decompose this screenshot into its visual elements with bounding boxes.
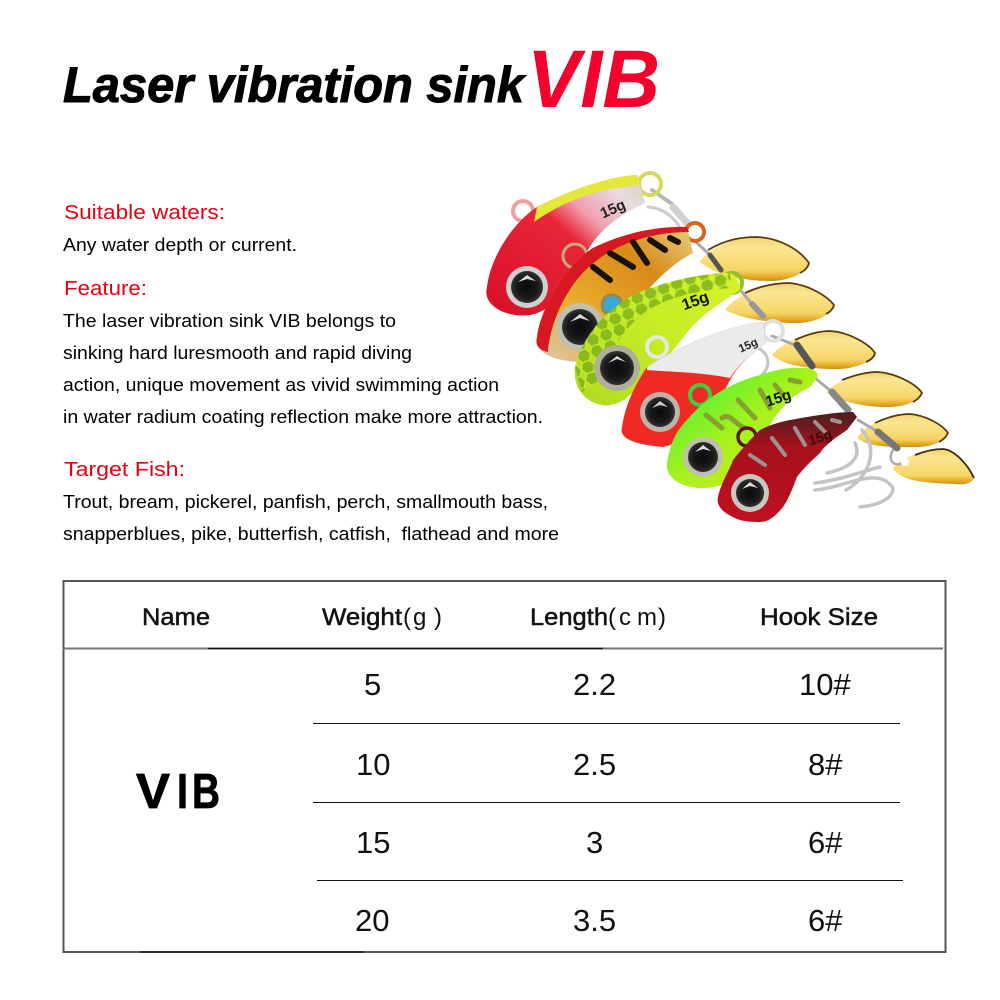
text block: feature xyxy=(63,278,543,427)
icon: swivels and hooks xyxy=(648,190,900,507)
table header: ( xyxy=(608,604,616,631)
text block: feature: action, unique movement as vivid swimming action xyxy=(63,375,499,395)
table rows: weight, length, hook size: 6# xyxy=(808,903,843,938)
lure 5: neon green: 15g xyxy=(764,386,793,411)
name cell: I xyxy=(177,765,188,819)
name cell: V xyxy=(136,765,170,819)
table rows: weight, length, hook size xyxy=(355,667,851,938)
table header: Weight xyxy=(322,604,402,631)
table header: Name xyxy=(142,604,210,631)
text block: suitable waters: Suitable waters: xyxy=(64,202,225,224)
table header: Length xyxy=(530,604,608,631)
text block: suitable waters xyxy=(63,202,297,255)
title: VIB xyxy=(527,34,660,125)
table rows: weight, length, hook size: 8# xyxy=(808,747,843,782)
table rows: weight, length, hook size: 10# xyxy=(799,667,851,702)
lure 2: orange with black stripe xyxy=(536,223,704,362)
table rows: weight, length, hook size: 15 xyxy=(356,825,390,860)
lure 1: red and yellow xyxy=(486,173,661,315)
text block: feature: Feature: xyxy=(64,278,147,300)
text block: feature: in water radium coating reflection make more attraction. xyxy=(63,407,543,427)
table header: ) xyxy=(658,604,666,631)
lure 3: lime green with scale pattern: 15g xyxy=(680,289,711,314)
table header: cm xyxy=(619,604,657,631)
lure 6: dark red xyxy=(718,412,857,522)
lure 3: lime green with scale pattern xyxy=(575,273,742,405)
text block: target fish: snapperblues, pike, butterfish, catfish, flathead and more xyxy=(63,524,559,544)
text block: target fish: Trout, bream, pickerel, panfish, perch, smallmouth bass, xyxy=(63,492,548,512)
lure 4: white and red: 15g xyxy=(737,336,760,355)
text block: feature: The laser vibration sink VIB belongs to xyxy=(63,311,396,331)
text block: target fish: Target Fish: xyxy=(64,459,185,481)
name cell: B xyxy=(192,765,220,819)
table frame xyxy=(63,581,946,952)
icon: gold blades xyxy=(700,237,974,484)
table header xyxy=(142,604,878,631)
name cell xyxy=(136,765,220,819)
lure 6: dark red: 15g xyxy=(806,426,834,448)
table rows: weight, length, hook size: 2.5 xyxy=(573,747,616,782)
product photo: six lures xyxy=(486,173,974,522)
text block: suitable waters: Any water depth or current. xyxy=(63,235,297,255)
title: Laser vibration sink xyxy=(63,57,526,113)
table rows: weight, length, hook size: 5 xyxy=(364,667,381,702)
table rows: weight, length, hook size: 2.2 xyxy=(573,667,616,702)
lure 1: red and yellow: 15g xyxy=(598,196,628,222)
table header: g xyxy=(413,604,426,631)
table rows: weight, length, hook size: 20 xyxy=(355,903,389,938)
lure 5: neon green xyxy=(667,368,818,488)
text block: feature: sinking hard luresmooth and rapid diving xyxy=(63,343,412,363)
table header: ) xyxy=(434,604,442,631)
table header: ( xyxy=(403,604,411,631)
table rows: weight, length, hook size: 10 xyxy=(356,747,390,782)
table rows: weight, length, hook size: 6# xyxy=(808,825,843,860)
table rows: weight, length, hook size: 3 xyxy=(586,825,603,860)
table rows: weight, length, hook size: 3.5 xyxy=(573,903,616,938)
title xyxy=(63,34,660,125)
lure 4: white and red xyxy=(622,321,783,447)
spec table xyxy=(63,581,946,952)
table header: Hook Size xyxy=(760,604,878,631)
text block: target fish xyxy=(63,459,559,544)
